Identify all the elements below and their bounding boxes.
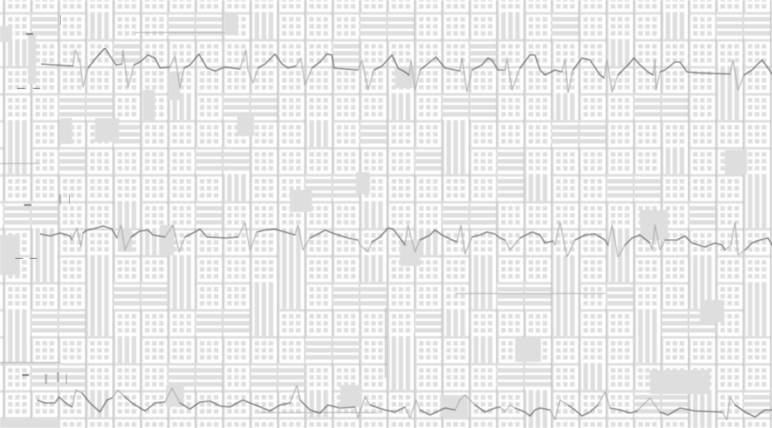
- lead III trace: [37, 385, 772, 420]
- lead I trace: [41, 48, 772, 93]
- lead II calibration marks: [15, 194, 70, 259]
- lead III calibration marks: [22, 372, 67, 384]
- lead II trace: [40, 222, 772, 257]
- lead I calibration marks: [17, 15, 61, 89]
